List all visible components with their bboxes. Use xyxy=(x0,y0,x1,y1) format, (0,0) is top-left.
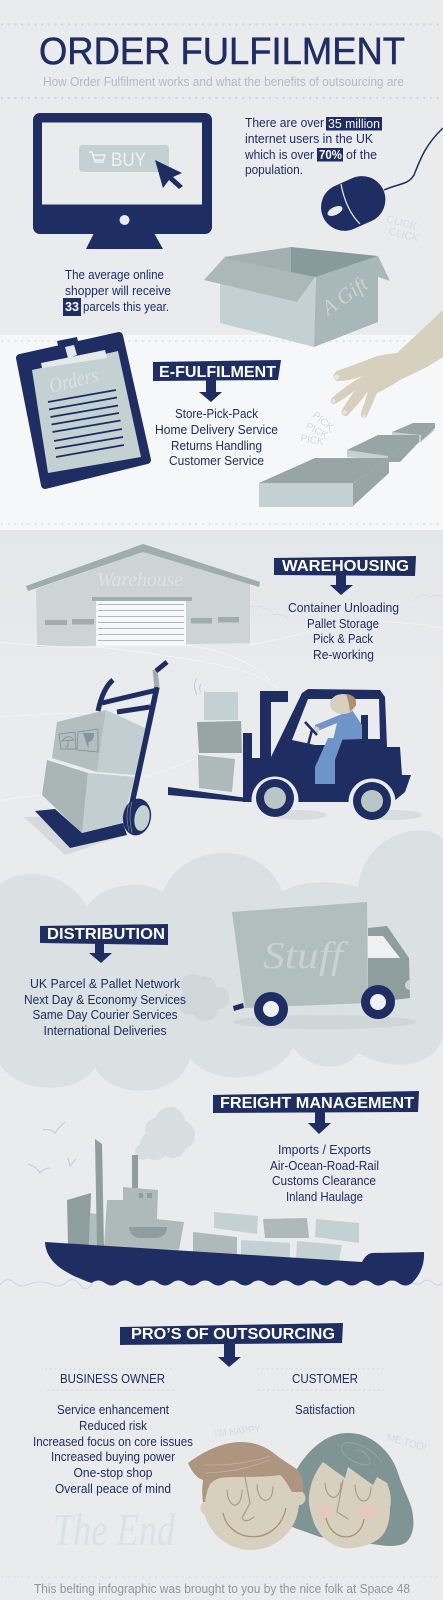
business owner benefits: Increased buying power xyxy=(51,1449,176,1464)
icon: warehouse building xyxy=(26,544,260,647)
column: customer xyxy=(258,1369,387,1417)
arrow xyxy=(330,575,353,595)
business owner benefits: Overall peace of mind xyxy=(55,1481,171,1496)
icon: container ship xyxy=(45,1107,424,1286)
title: ORDER FULFILMENT xyxy=(39,31,405,73)
internet users stat: There are over xyxy=(245,115,325,130)
warehousing services list xyxy=(288,600,399,662)
customer benefit: Satisfaction xyxy=(295,1402,355,1417)
average parcels stat: shopper will receive xyxy=(65,283,171,298)
freight services list: Inland Haulage xyxy=(286,1189,363,1204)
internet users stat: of the xyxy=(346,147,377,162)
average parcels stat: 33 xyxy=(65,300,79,314)
distribution services list xyxy=(24,976,186,1038)
business owner benefits xyxy=(33,1402,193,1496)
internet users stat: population. xyxy=(245,162,303,177)
arrow xyxy=(199,380,222,402)
stuff label: Stuff xyxy=(263,935,348,977)
icon: forklift with driver xyxy=(168,678,422,826)
footer credit: This belting infographic was brought to you by the nice folk at Space 48 xyxy=(34,1581,410,1596)
gift label: A Gift xyxy=(315,271,373,321)
ship hull xyxy=(45,1242,424,1286)
icon: picking hand xyxy=(331,310,443,418)
column: customer: CUSTOMER xyxy=(292,1371,358,1386)
icon: delivery truck xyxy=(232,902,417,1029)
warehousing services list: Pallet Storage xyxy=(307,616,379,631)
icon: cursor xyxy=(155,160,183,189)
icon: birds xyxy=(28,1122,76,1173)
heading: warehousing xyxy=(274,556,416,595)
truck exhaust smoke xyxy=(178,974,229,1021)
business owner benefits: One-stop shop xyxy=(74,1465,152,1480)
water waves xyxy=(0,1280,443,1289)
internet users stat: 70% xyxy=(319,148,342,162)
e-fulfilment services list: Returns Handling xyxy=(171,438,262,453)
warehouse label: Warehouse xyxy=(97,569,183,591)
heading: e-fulfilment xyxy=(153,360,281,402)
warehousing services list: Container Unloading xyxy=(288,600,399,615)
heading: distribution xyxy=(40,924,168,963)
business owner benefits: Service enhancement xyxy=(57,1402,169,1417)
heading: freight management xyxy=(213,1091,419,1134)
icon: man's face xyxy=(188,1442,306,1550)
arrow xyxy=(89,943,112,963)
me too label: ME TOO! xyxy=(385,1431,428,1454)
column: business owner xyxy=(33,1369,193,1496)
distribution services list: International Deliveries xyxy=(44,1023,167,1038)
icon: woman's face xyxy=(290,1433,413,1548)
distribution services list: Same Day Courier Services xyxy=(32,1007,178,1022)
pick pick pick label xyxy=(299,410,337,448)
average parcels stat xyxy=(63,267,171,316)
arrow xyxy=(218,1344,241,1367)
pick pick pick label: PICK, xyxy=(304,421,332,443)
e-fulfilment services list: Store-Pick-Pack xyxy=(175,406,258,421)
warehousing services list: Re-working xyxy=(313,647,374,662)
freight services list: Imports / Exports xyxy=(278,1142,371,1157)
click click label: CLICK xyxy=(387,225,420,245)
driver xyxy=(305,694,362,784)
icon: open gift box xyxy=(204,247,390,347)
distribution services list: Next Day & Economy Services xyxy=(24,992,186,1007)
internet users stat: which is over xyxy=(244,147,315,162)
freight services list: Customs Clearance xyxy=(272,1173,376,1188)
buy label: BUY xyxy=(111,150,146,171)
arrow xyxy=(308,1112,331,1134)
fragile and umbrella symbols xyxy=(59,729,98,752)
cloud background: distribution xyxy=(0,831,443,1091)
heading: pros of outsourcing: PRO’S OF OUTSOURCING xyxy=(131,1326,335,1343)
icon: parcels xyxy=(259,423,435,507)
orders label: Orders xyxy=(46,362,101,398)
distribution services list: UK Parcel & Pallet Network xyxy=(30,976,180,991)
the end handwriting: The End xyxy=(53,1504,176,1555)
pick pick pick label: PICK xyxy=(299,433,325,448)
heading: pros of outsourcing xyxy=(120,1323,343,1367)
business owner benefits: Increased focus on core issues xyxy=(33,1434,193,1449)
click click label xyxy=(385,213,421,245)
e-fulfilment services list: Customer Service xyxy=(169,453,264,468)
click click label: CLICK, xyxy=(385,213,421,234)
pick pick pick label: PICK, xyxy=(310,410,337,435)
heading: distribution: DISTRIBUTION xyxy=(47,926,165,943)
warehousing services list: Pick & Pack xyxy=(313,631,373,646)
e-fulfilment services list: Home Delivery Service xyxy=(155,422,278,437)
e-fulfilment services list xyxy=(155,406,278,468)
icon: computer monitor with buy button xyxy=(33,113,212,249)
business owner benefits: Reduced risk xyxy=(79,1418,147,1433)
average parcels stat: parcels this year. xyxy=(83,299,169,314)
internet users stat: 35 million xyxy=(328,117,380,131)
happy label: I'M HAPPY xyxy=(214,1423,261,1440)
icon: clipboard with orders xyxy=(20,336,147,485)
internet users stat: internet users in the UK xyxy=(245,131,373,146)
subtitle: How Order Fulfilment works and what the benefits of outsourcing are xyxy=(43,75,404,89)
heading: e-fulfilment: E-FULFILMENT xyxy=(159,364,277,381)
heading: warehousing: WAREHOUSING xyxy=(282,558,409,575)
heading: freight management: FREIGHT MANAGEMENT xyxy=(220,1095,415,1112)
icon: hand truck with boxes xyxy=(24,662,167,855)
average parcels stat: The average online xyxy=(65,267,164,282)
internet users stat xyxy=(244,115,382,177)
freight services list xyxy=(270,1142,379,1204)
column: business owner: BUSINESS OWNER xyxy=(60,1371,165,1386)
freight services list: Air-Ocean-Road-Rail xyxy=(270,1158,379,1173)
icon: computer mouse xyxy=(313,128,443,238)
icon: shopping cart xyxy=(89,152,105,162)
